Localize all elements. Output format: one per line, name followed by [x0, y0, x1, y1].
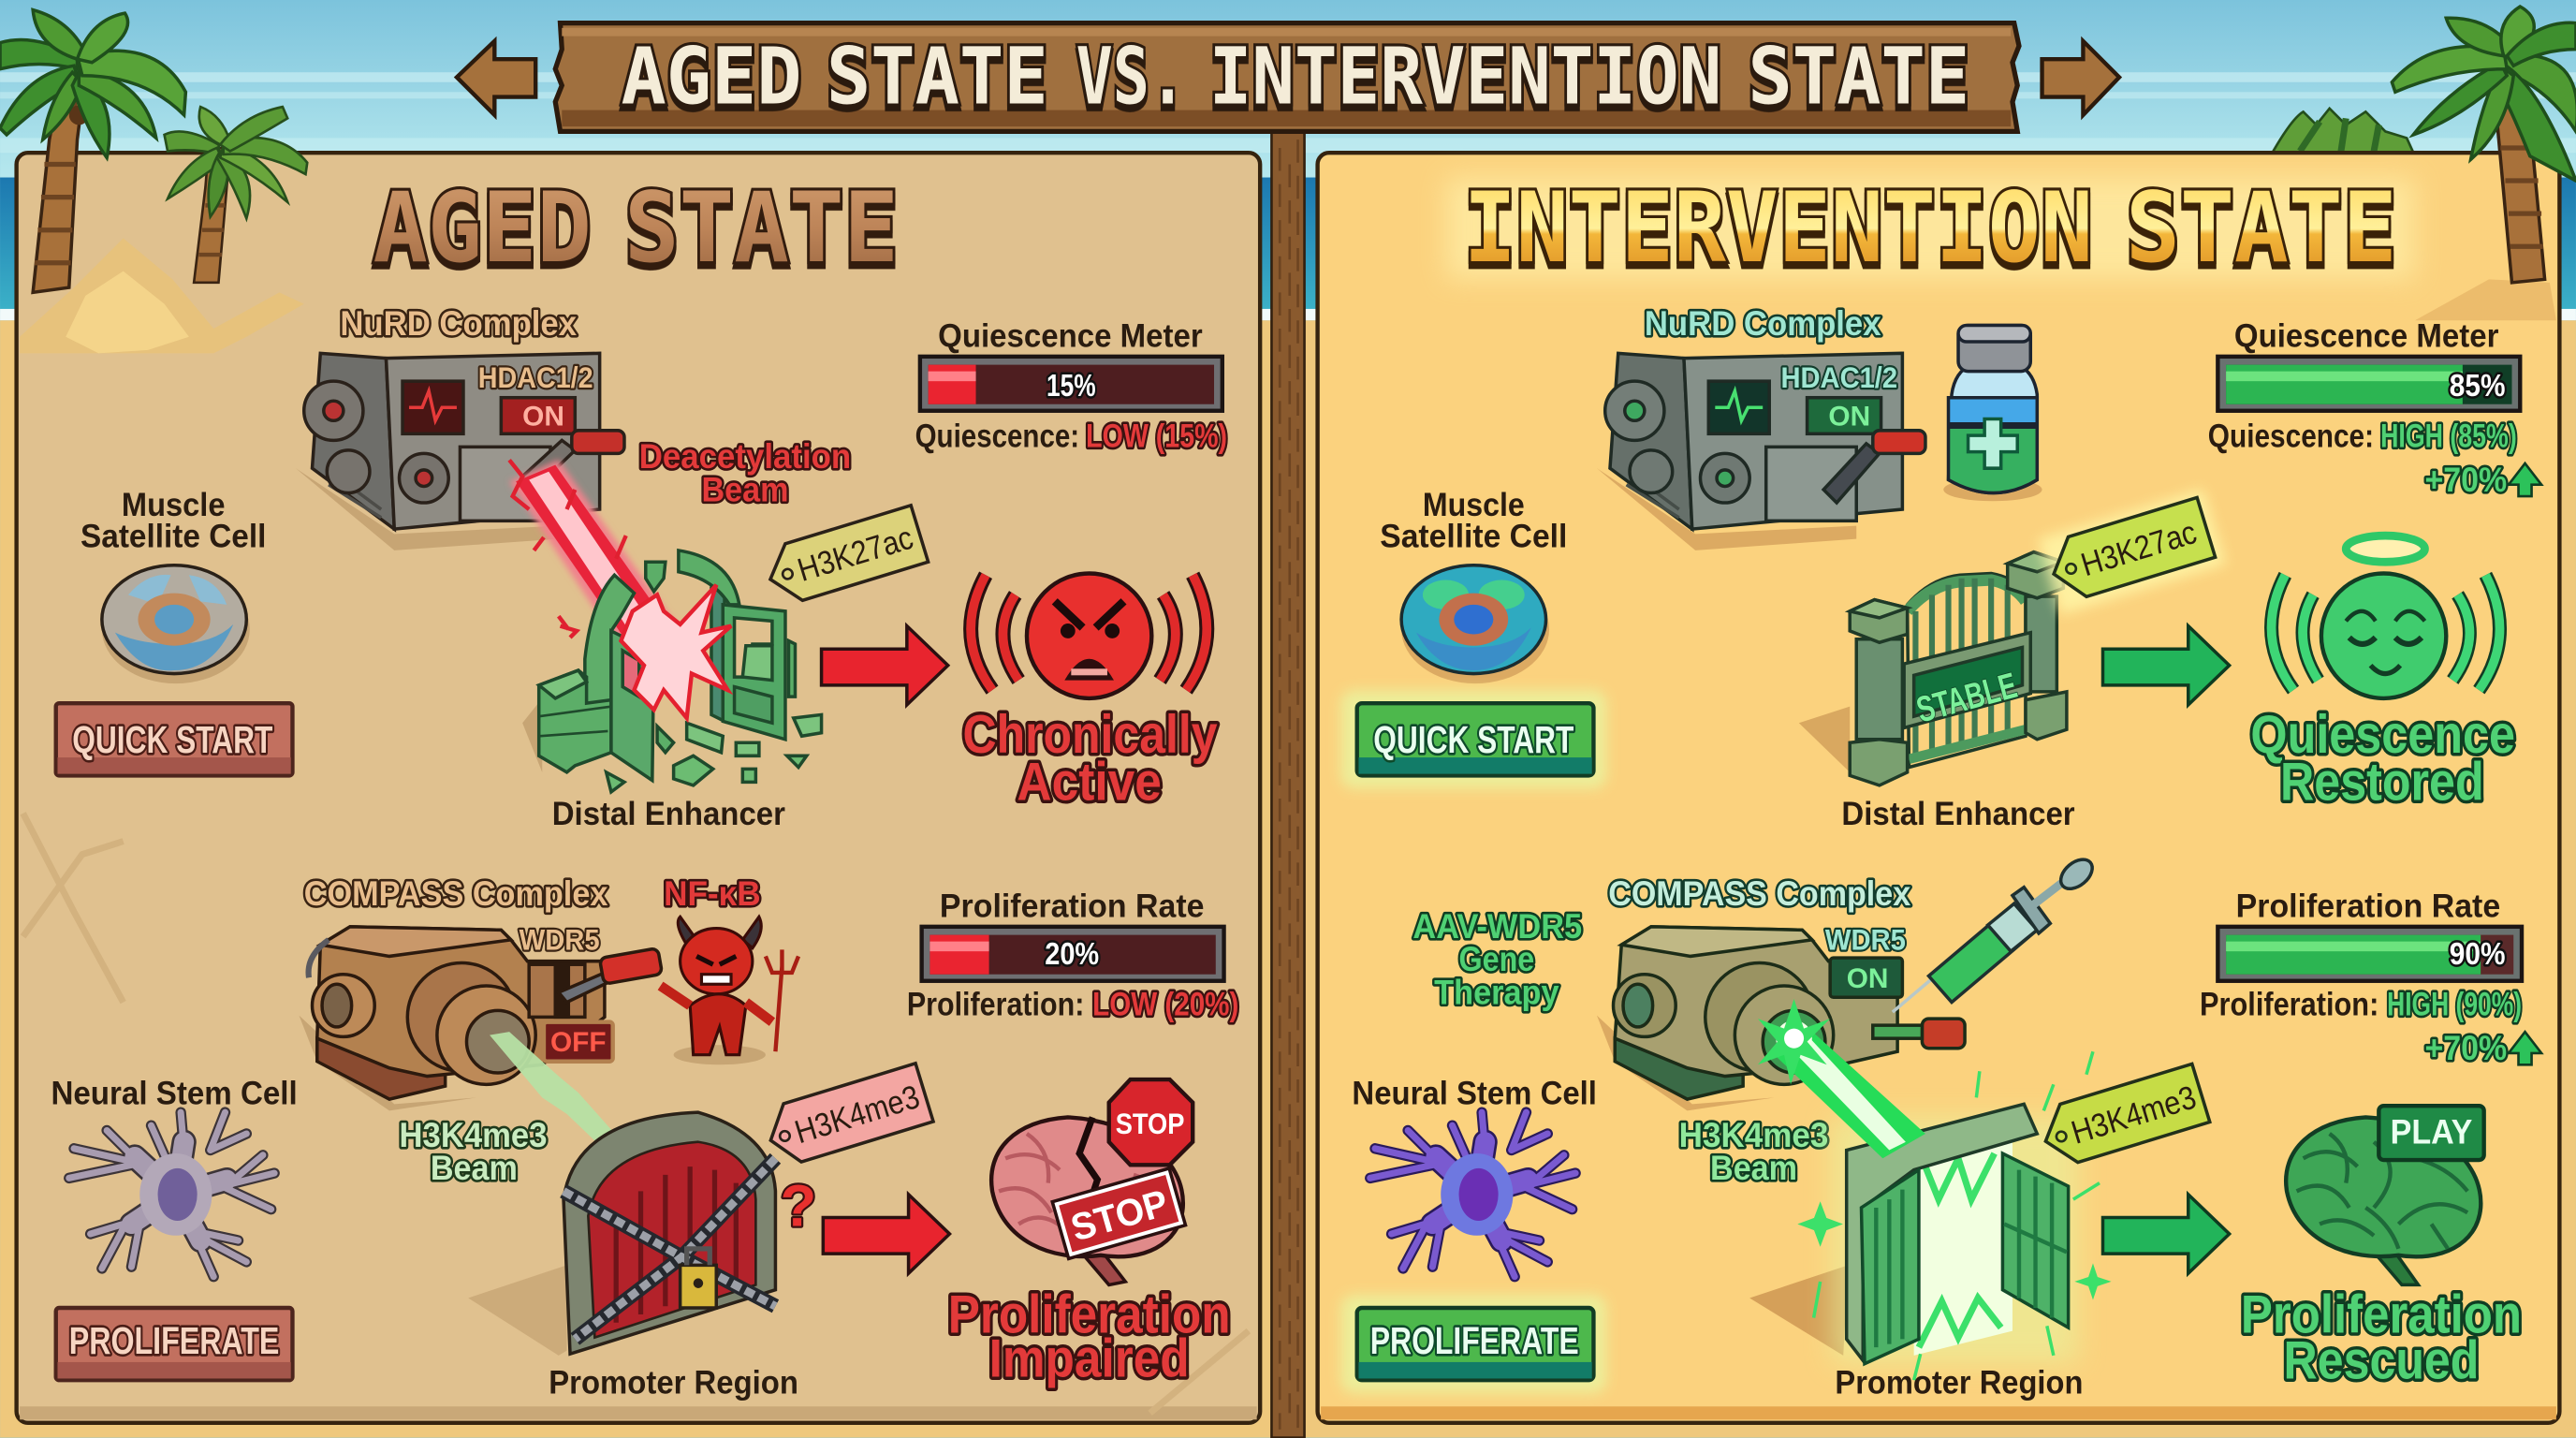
small palm behind right panel [2271, 109, 2415, 156]
panel: intervention state [1318, 153, 2559, 1423]
icon: stable enhancer gate [1799, 552, 2067, 785]
title text: VS. [1076, 31, 1186, 123]
status: quiescence high: Quiescence: [2208, 418, 2374, 454]
icon: damaged brain [991, 1117, 1183, 1284]
title text: INTERVENTION [1209, 31, 1721, 123]
status: quiescence low: LOW (15%) [1086, 418, 1227, 454]
meter title: Proliferation Rate [2236, 888, 2500, 924]
panel background [17, 153, 1260, 1423]
label: H3K4me3 beam: H3K4me3 [1679, 1116, 1828, 1154]
title text [621, 31, 1969, 123]
icon: stable enhancer gate: STABLE [1912, 666, 2021, 730]
button: proliferate [1340, 1295, 1606, 1393]
outcome: chronically active: Active [1017, 753, 1162, 813]
status: proliferation low [907, 987, 1238, 1023]
label: H3K4me3 beam [1679, 1116, 1828, 1187]
status: proliferation low: Proliferation: [907, 987, 1084, 1023]
button: quick start [56, 703, 292, 775]
arrow: to quiescence restored [2102, 626, 2230, 705]
icon: devil NF-kB [661, 917, 798, 1064]
title text: STATE [1748, 31, 1969, 123]
icon: angry face [971, 574, 1207, 698]
label: NuRD complex: NuRD Complex [340, 304, 578, 343]
outcome: chronically active: Chronically [963, 705, 1218, 765]
icon: stop sign [1052, 1168, 1185, 1258]
icon: medicine vial [1943, 325, 2042, 501]
icon: stop octagon [1109, 1079, 1193, 1165]
label: promoter region: Promoter Region [549, 1364, 798, 1401]
icon: NuRD machine: ON [522, 402, 564, 433]
status: proliferation high: Proliferation: [2200, 987, 2378, 1023]
scenery: large left palm [0, 10, 185, 292]
button: quick start: QUICK START [1373, 718, 1574, 761]
icon: question mark: ? [781, 1173, 816, 1239]
button: proliferate: PROLIFERATE [69, 1319, 279, 1362]
label: distal enhancer: Distal Enhancer [1841, 796, 2075, 832]
icon: COMPASS machine active: ON [1847, 963, 1888, 994]
status: quiescence high: HIGH (85%) [2380, 418, 2517, 454]
status: quiescence high [2208, 418, 2517, 454]
value: 85% [2450, 369, 2505, 404]
icon: stop octagon: STOP [1116, 1107, 1184, 1140]
status: proliferation low: LOW (20%) [1092, 987, 1238, 1023]
panel background [1318, 153, 2559, 1423]
icon: locked promoter gate [468, 1112, 775, 1356]
label: H3K4me3 beam [400, 1116, 547, 1187]
burst: beam impact [621, 585, 731, 718]
label: muscle satellite cell: Muscle [1423, 487, 1525, 523]
delta: plus 70 quiescence: +70% [2424, 461, 2507, 499]
wood plank [555, 23, 2019, 131]
icon: healthy brain [2286, 1117, 2481, 1284]
badge: play [2378, 1106, 2484, 1160]
status: quiescence low: Quiescence: [915, 418, 1079, 454]
icon: COMPASS machine [299, 927, 663, 1110]
scenery: sand mound [20, 238, 304, 353]
outcome: proliferation impaired: Proliferation [948, 1284, 1231, 1344]
icon: broken enhancer gate [522, 550, 822, 792]
scenery: large right palm [2392, 7, 2576, 320]
title text: AGED [621, 31, 802, 123]
arrow: to proliferation rescued [2102, 1195, 2230, 1273]
label: HDAC1/2: HDAC1/2 [478, 360, 593, 394]
heading: intervention state: STATE [2126, 172, 2397, 285]
label: H3K4me3 beam: H3K4me3 [400, 1116, 547, 1154]
tag: H3K4me3 lime [2037, 1064, 2210, 1169]
tag: H3K4me3 pink: H3K4me3 [791, 1078, 924, 1151]
tag: H3K27ac [762, 506, 929, 608]
label: AAV-WDR5 gene therapy: Gene [1459, 940, 1534, 978]
icon: syringe [1893, 854, 2098, 1012]
tag: H3K27ac glowing [2038, 489, 2226, 615]
meter title: Quiescence Meter [2234, 317, 2499, 354]
outcome: quiescence restored [2250, 705, 2515, 813]
label: COMPASS complex: COMPASS Complex [304, 874, 608, 913]
label: neural stem cell: Neural Stem Cell [1352, 1075, 1597, 1111]
label: WDR5: WDR5 [520, 922, 600, 956]
icon: COMPASS machine active [1597, 927, 1965, 1110]
button: proliferate [56, 1308, 292, 1380]
label: muscle satellite cell: Muscle [122, 487, 225, 523]
label: COMPASS complex: COMPASS Complex [1608, 874, 1911, 913]
label: NF-kB: NF-κB [664, 874, 761, 913]
heading: aged state [373, 172, 899, 285]
meter: quiescence [920, 317, 1222, 411]
beam: weak H3K4me3 [490, 1032, 618, 1151]
status: proliferation high [2200, 987, 2522, 1023]
label: neural stem cell: Neural Stem Cell [51, 1075, 298, 1111]
label: AAV-WDR5 gene therapy: Therapy [1434, 973, 1559, 1011]
title text: STATE [827, 31, 1048, 123]
icon: vibrant neuron [1370, 1112, 1575, 1277]
label: deacetylation beam: Beam [701, 470, 788, 508]
label: HDAC1/2: HDAC1/2 [1781, 360, 1897, 394]
label: AAV-WDR5 gene therapy: AAV-WDR5 [1412, 907, 1582, 946]
label: H3K4me3 beam: Beam [1710, 1149, 1797, 1187]
outcome: chronically active [963, 705, 1218, 813]
meter title: Proliferation Rate [940, 888, 1204, 924]
beam: deacetylation [509, 460, 681, 666]
label: deacetylation beam [639, 437, 851, 508]
scenery: small left palm [165, 107, 307, 283]
icon: COMPASS machine: OFF [550, 1027, 607, 1058]
icon: NuRD machine restored [1597, 353, 1925, 550]
meter: quiescence [2217, 317, 2520, 411]
tag: H3K27ac: H3K27ac [794, 520, 917, 589]
label: muscle satellite cell [80, 487, 266, 554]
arrow: to chronically active [822, 626, 948, 705]
beam: active H3K4me3 [1758, 999, 1925, 1158]
panel: aged state [17, 153, 1260, 1423]
button: quick start [1340, 690, 1606, 788]
icon: stop sign: STOP [1066, 1181, 1173, 1250]
label: WDR5: WDR5 [1825, 922, 1906, 956]
meter: proliferation rate [922, 888, 1224, 981]
badge: play: PLAY [2391, 1112, 2472, 1151]
outcome: proliferation impaired [948, 1284, 1231, 1389]
value: 90% [2450, 937, 2505, 972]
arrow: right [2042, 41, 2119, 115]
value: 20% [1045, 937, 1099, 972]
heading: aged state: AGED [373, 172, 592, 285]
heading: aged state: STATE [624, 172, 899, 285]
status: quiescence low [915, 418, 1227, 454]
outcome: proliferation rescued: Proliferation [2241, 1284, 2522, 1344]
label: NuRD complex: NuRD Complex [1645, 304, 1881, 343]
label: AAV-WDR5 gene therapy [1412, 907, 1582, 1011]
label: distal enhancer: Distal Enhancer [552, 796, 785, 832]
main title sign [555, 23, 2019, 131]
outcome: quiescence restored: Quiescence [2250, 705, 2515, 765]
outcome: proliferation rescued: Rescued [2284, 1330, 2479, 1390]
arrow: to proliferation impaired [823, 1195, 949, 1273]
icon: pale satellite cell [102, 565, 250, 683]
tag: H3K4me3 pink [762, 1064, 933, 1168]
outcome: proliferation rescued [2241, 1284, 2522, 1390]
button: quick start: QUICK START [72, 718, 273, 761]
value: 15% [1046, 369, 1096, 404]
label: promoter region: Promoter Region [1835, 1364, 2083, 1401]
delta: plus 70 proliferation: +70% [2424, 1029, 2507, 1067]
icon: NuRD machine restored: ON [1828, 402, 1870, 433]
center wooden post [1271, 128, 1305, 1438]
outcome: proliferation impaired: Impaired [989, 1329, 1190, 1389]
label: deacetylation beam: Deacetylation [639, 437, 851, 476]
label: H3K4me3 beam: Beam [431, 1149, 518, 1187]
label: muscle satellite cell [1380, 487, 1567, 554]
icon: NuRD machine [296, 353, 624, 550]
status: proliferation high: HIGH (90%) [2387, 987, 2522, 1023]
heading: intervention state: INTERVENTION [1464, 172, 2093, 285]
icon: halo [2346, 536, 2424, 562]
meter title: Quiescence Meter [938, 317, 1203, 354]
tag: H3K4me3 lime: H3K4me3 [2067, 1078, 2201, 1152]
label: muscle satellite cell: Satellite Cell [1380, 518, 1567, 554]
meter: proliferation rate [2217, 888, 2522, 981]
outcome: quiescence restored: Restored [2280, 753, 2484, 813]
arrow: left [457, 41, 535, 115]
icon: pale neuron [69, 1112, 274, 1277]
icon: open promoter gate [1749, 1051, 2106, 1380]
tag: H3K27ac glowing: H3K27ac [2077, 514, 2201, 583]
icon: vibrant satellite cell [1401, 565, 1549, 683]
icon: calm face [2272, 574, 2499, 698]
button: proliferate: PROLIFERATE [1370, 1319, 1579, 1362]
label: muscle satellite cell: Satellite Cell [80, 518, 266, 554]
